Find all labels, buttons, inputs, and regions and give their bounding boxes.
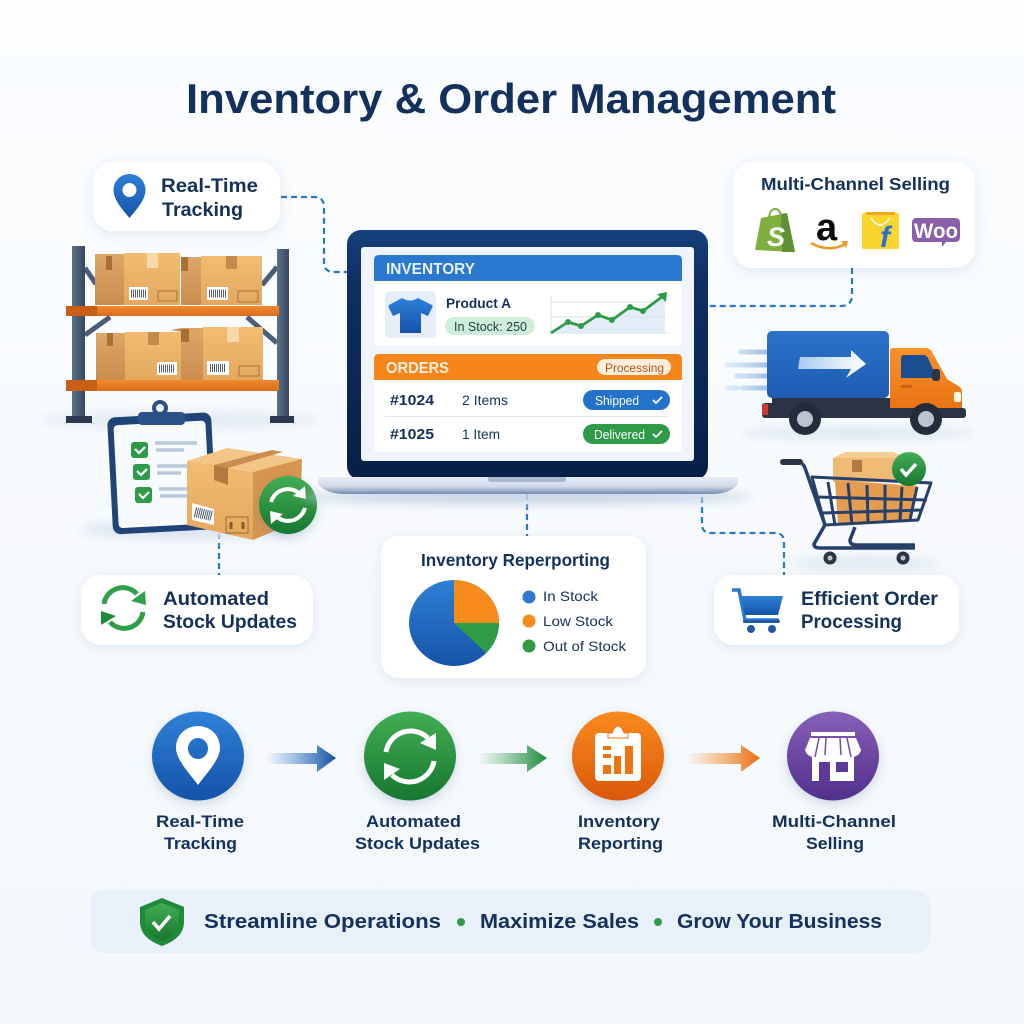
step: automated stock updates: Stock Updates <box>355 834 480 853</box>
panel: inventory: INVENTORY <box>386 261 475 278</box>
processing pill: Processing <box>605 361 664 375</box>
panel: inventory <box>374 255 682 346</box>
box in cart <box>833 452 917 525</box>
stock pill <box>445 317 535 335</box>
step: automated stock updates <box>355 712 480 853</box>
stock pill: In Stock: 250 <box>454 320 527 334</box>
illustration: package with sync badge <box>187 448 317 540</box>
panel: inventory reporting <box>381 536 646 678</box>
label: Automated <box>163 589 269 610</box>
icon: check badge <box>892 452 926 486</box>
panel: orders <box>374 354 682 452</box>
icon: shield <box>140 898 184 946</box>
step: real-time tracking <box>152 712 244 853</box>
order row 1025: Delivered <box>594 428 645 442</box>
icon: marketplace a: a <box>816 207 838 249</box>
panel: automated stock updates <box>81 575 313 645</box>
step: automated stock updates: Automated <box>366 812 461 831</box>
label: Real-Time <box>161 176 258 197</box>
step: real-time tracking: Real-Time <box>156 812 244 831</box>
laptop frame <box>347 230 708 480</box>
panel: inventory: Product A <box>446 296 511 311</box>
connector: multi-channel to laptop <box>708 268 852 306</box>
connector: box to stock updates <box>218 533 220 575</box>
icon: marketplace a <box>811 207 848 249</box>
icon: yellow shopping bag <box>862 212 899 254</box>
arrow: step 2 to 3 <box>478 745 547 772</box>
box bottom left <box>96 332 181 380</box>
panel: automated stock updates: Stock Updates <box>163 612 297 633</box>
arrow on cargo <box>798 350 866 378</box>
icon: woo badge: Woo <box>914 220 958 243</box>
banner: benefits <box>90 890 930 953</box>
cab <box>890 348 962 408</box>
laptop base <box>318 477 738 494</box>
cargo box <box>767 331 889 398</box>
connector: tracking to laptop <box>281 197 347 272</box>
step: real-time tracking: Tracking <box>164 834 237 853</box>
illustration: clipboard checklist <box>80 402 300 539</box>
wheels <box>789 403 942 435</box>
panel: multi-channel selling <box>733 162 975 268</box>
laptop screen <box>361 247 694 461</box>
connector: laptop to reporting <box>526 494 528 536</box>
illustration: warehouse shelf with boxes <box>40 246 320 429</box>
icon: shopping bag <box>755 209 795 252</box>
step: multi-channel selling: Multi-Channel <box>772 812 896 831</box>
line chart <box>551 292 670 333</box>
icon: sync badge <box>259 476 317 534</box>
heading: Inventory Reperporting <box>421 550 610 570</box>
panel: real-time tracking: Tracking <box>162 200 243 221</box>
step: multi-channel selling: Selling <box>806 834 864 853</box>
order row 1024: #1024 <box>390 393 434 409</box>
speed lines <box>727 352 767 388</box>
order row 1024: Shipped <box>595 394 639 408</box>
benefit text: Streamline Operations <box>204 911 441 933</box>
box top right <box>181 256 262 305</box>
panel: orders: ORDERS <box>386 360 449 377</box>
order row 1025: 1 Item <box>462 427 500 442</box>
legend: Out of Stock <box>543 638 627 654</box>
connector: laptop to order processing <box>702 497 784 575</box>
icon: location pin <box>114 174 146 218</box>
step: multi-channel selling <box>772 712 896 853</box>
arrow: step 3 to 4 <box>686 745 760 772</box>
panel: efficient order processing: Processing <box>801 612 902 633</box>
icon: cart <box>732 590 783 633</box>
panel: efficient order processing <box>714 575 959 645</box>
step: inventory reporting: Inventory <box>578 812 661 831</box>
order row 1024: 2 Items <box>462 393 508 408</box>
illustration: laptop dashboard <box>303 230 753 504</box>
order row 1024 <box>390 390 670 410</box>
icon: yellow shopping bag: f <box>880 221 893 254</box>
step: inventory reporting <box>572 712 664 853</box>
title: Inventory & Order Management <box>186 75 836 122</box>
arrow: step 1 to 2 <box>265 745 336 772</box>
banner: benefits: Grow Your Business <box>677 911 882 933</box>
icon: t-shirt <box>385 291 436 338</box>
pie chart <box>409 580 499 666</box>
label: Efficient Order <box>801 589 939 610</box>
banner: benefits: Maximize Sales <box>480 911 639 933</box>
icon: shopping bag: S <box>767 222 785 252</box>
illustration: shopping cart with box <box>783 452 941 569</box>
legend: In Stock <box>543 588 599 604</box>
box bottom right <box>171 327 263 380</box>
panel: real-time tracking <box>93 162 280 231</box>
legend: Low Stock <box>543 613 614 629</box>
box top left <box>95 253 180 305</box>
icon: sync arrows <box>101 588 146 628</box>
heading: Multi-Channel Selling <box>761 174 950 194</box>
order row 1025 <box>390 424 670 444</box>
legend <box>522 588 627 654</box>
illustration: delivery truck <box>727 331 976 439</box>
order row 1025: #1025 <box>390 427 434 443</box>
step: inventory reporting: Reporting <box>578 834 663 853</box>
